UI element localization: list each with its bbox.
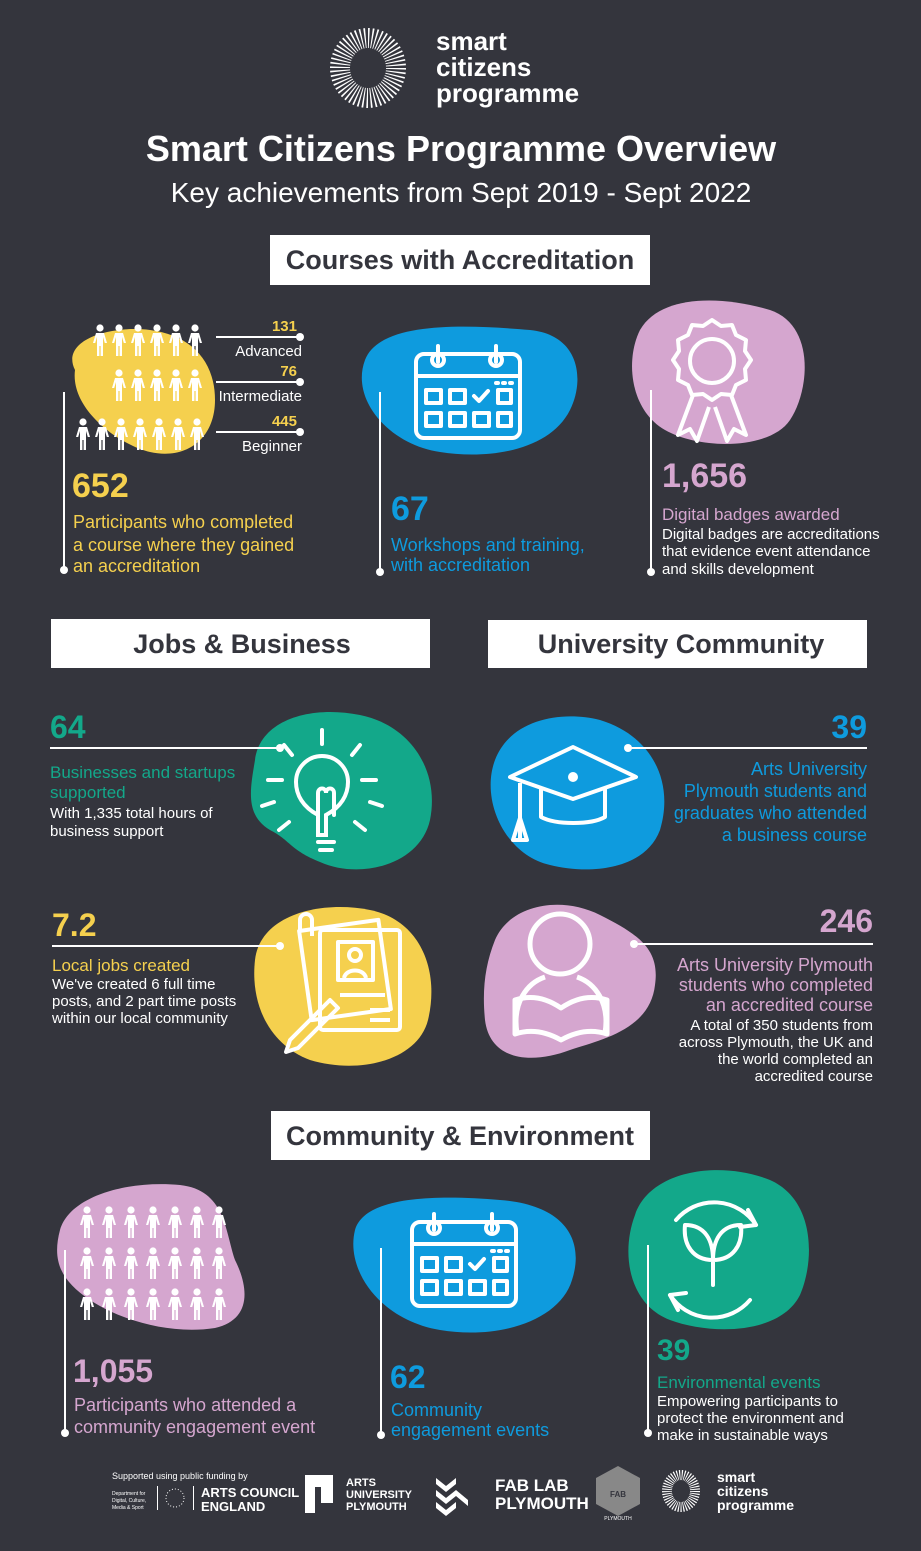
panel: participants: 652: [72, 467, 129, 505]
panel: community participants: Participants who attended a: [74, 1395, 297, 1415]
panel: environmental events: 39: [657, 1334, 690, 1367]
panel: arts university business course: Arts University: [751, 759, 867, 779]
panel: local jobs: 7.2: [52, 907, 96, 943]
footer: partner logos: citizens: [717, 1483, 769, 1499]
heading: University Community: [488, 620, 867, 668]
panel: community participants: 1,055: [73, 1353, 153, 1389]
panel: community events: [353, 1198, 576, 1440]
logo: smart: [436, 26, 507, 56]
panel: digital badges: Digital badges awarded: [662, 505, 840, 524]
subtitle: Key achievements from Sept 2019 - Sept 2022: [171, 177, 751, 208]
panel: participants: [60, 318, 304, 576]
panel: businesses: With 1,335 total hours of: [50, 805, 213, 822]
panel: participants: an accreditation: [73, 556, 200, 576]
panel: local jobs: within our local community: [51, 1010, 228, 1027]
footer: partner logos: PLYMOUTH: [495, 1494, 589, 1513]
panel: participants: Intermediate: [219, 388, 302, 405]
panel: environmental events: Environmental events: [657, 1373, 820, 1392]
panel: arts university business course: 39: [831, 709, 867, 745]
footer: partner logos: PLYMOUTH: [604, 1516, 632, 1522]
footer: partner logos: Department for: [112, 1491, 146, 1497]
panel: digital badges: that evidence event attendance: [662, 543, 870, 560]
panel: community events: 62: [390, 1359, 426, 1395]
panel: workshops: 67: [391, 490, 429, 528]
panel: participants: 76: [280, 363, 297, 380]
panel: accredited students: Arts University Plymouth: [677, 955, 873, 975]
footer: partner logos: UNIVERSITY: [346, 1489, 413, 1501]
logo: citizens: [436, 52, 531, 82]
panel: environmental events: Empowering participants to: [657, 1393, 838, 1410]
title: Smart Citizens Programme Overview: [146, 128, 777, 169]
panel: environmental events: [628, 1170, 844, 1444]
panel: participants: 445: [272, 413, 297, 430]
heading: University Community: University Community: [538, 629, 824, 659]
footer: partner logos: [112, 1466, 794, 1522]
panel: arts university business course: Plymouth students and: [684, 781, 867, 801]
panel: digital badges: 1,656: [662, 457, 747, 495]
panel: accredited students: 246: [820, 903, 873, 939]
panel: arts university business course: graduates who attended: [674, 803, 867, 823]
panel: accredited students: students who completed: [679, 975, 873, 995]
panel: accredited students: A total of 350 students from: [690, 1017, 873, 1034]
heading: Jobs & Business: [51, 619, 430, 668]
panel: businesses: [50, 709, 432, 869]
footer: partner logos: Supported using public funding by: [112, 1471, 248, 1481]
panel: community participants: community engagement event: [74, 1417, 315, 1437]
logo: [340, 26, 579, 108]
heading: Courses with Accreditation: Courses with Accreditation: [286, 245, 634, 275]
panel: community participants: [57, 1184, 315, 1437]
heading: Community & Environment: [271, 1111, 650, 1160]
footer: partner logos: smart: [717, 1469, 755, 1485]
panel: workshops: Workshops and training,: [391, 535, 585, 555]
footer: partner logos: FAB LAB: [495, 1476, 569, 1495]
logo: programme: [436, 78, 579, 108]
panel: digital badges: and skills development: [662, 561, 815, 578]
footer: partner logos: Digital, Culture,: [112, 1498, 146, 1504]
panel: environmental events: protect the environment and: [657, 1410, 844, 1427]
panel: workshops: with accreditation: [390, 555, 530, 575]
footer: partner logos: FAB: [610, 1490, 626, 1499]
panel: accredited students: accredited course: [755, 1068, 873, 1085]
panel: participants: 131: [272, 318, 297, 335]
footer: partner logos: ENGLAND: [201, 1499, 265, 1514]
panel: arts university business course: a business course: [722, 825, 867, 845]
footer: partner logos: programme: [717, 1497, 794, 1513]
panel: digital badges: [632, 300, 880, 578]
panel: community events: Community: [391, 1400, 482, 1420]
panel: digital badges: Digital badges are accreditations: [662, 526, 880, 543]
panel: accredited students: the world completed an: [718, 1051, 873, 1068]
panel: accredited students: across Plymouth, the UK and: [679, 1034, 873, 1051]
panel: local jobs: posts, and 2 part time posts: [52, 993, 236, 1010]
panel: businesses: supported: [50, 783, 126, 802]
panel: local jobs: [51, 907, 431, 1066]
footer: partner logos: ARTS COUNCIL: [201, 1485, 299, 1500]
heading: Community & Environment: Community & Environment: [286, 1121, 634, 1151]
panel: businesses: business support: [50, 823, 164, 840]
panel: arts university business course: [491, 709, 867, 869]
panel: participants: Beginner: [242, 438, 302, 455]
footer: partner logos: ARTS: [346, 1477, 376, 1489]
panel: accredited students: an accredited course: [706, 995, 873, 1015]
panel: participants: a course where they gained: [73, 535, 294, 555]
panel: community events: engagement events: [391, 1420, 549, 1440]
heading: Jobs & Business: Jobs & Business: [133, 629, 351, 659]
heading: Courses with Accreditation: [270, 235, 650, 285]
panel: local jobs: Local jobs created: [52, 956, 190, 975]
panel: businesses: Businesses and startups: [50, 763, 235, 782]
footer: partner logos: Media & Sport: [112, 1505, 144, 1511]
panel: accredited students: [484, 903, 873, 1085]
panel: local jobs: We've created 6 full time: [52, 976, 216, 993]
panel: environmental events: make in sustainable ways: [657, 1427, 828, 1444]
panel: businesses: 64: [50, 709, 86, 745]
panel: participants: Participants who completed: [73, 512, 293, 532]
footer: partner logos: PLYMOUTH: [346, 1501, 407, 1513]
panel: participants: Advanced: [235, 343, 302, 360]
panel: workshops: [362, 327, 585, 576]
